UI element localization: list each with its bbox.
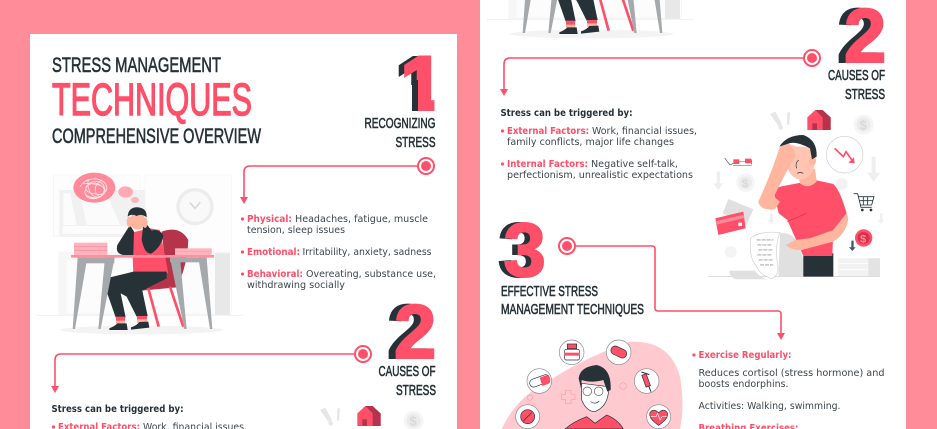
section 1 number: [398, 56, 434, 111]
list: exercise regularly: Exercise Regularly:: [698, 350, 792, 361]
arrow: section 1 connector: [240, 158, 434, 204]
panel: left poster page: [30, 34, 457, 429]
section 3 number: 3: [498, 208, 540, 293]
arrow: section 3 connector: [559, 238, 785, 340]
section 1 heading: [364, 115, 436, 151]
section 3 number: 3: [504, 208, 546, 293]
section 1 heading: RECOGNIZING: [364, 115, 436, 132]
section 2 number: 2: [387, 290, 429, 375]
title: TECHNIQUES: [52, 74, 252, 125]
section 1 number: 1: [401, 42, 443, 127]
list: symptoms of stress: [241, 214, 436, 291]
illustration: doctor with medical icons: [502, 340, 682, 429]
list: symptoms of stress: withdrawing socially: [247, 280, 345, 291]
title: STRESS MANAGEMENT: [52, 54, 221, 77]
section 2 number: 2: [394, 290, 436, 375]
section 1 heading: STRESS: [396, 134, 436, 151]
list: symptoms of stress: Irritability, anxiety, sadness: [302, 247, 432, 258]
list: exercise regularly: boosts endorphins.: [698, 379, 788, 390]
section 2 heading repeated: CAUSES OF: [828, 67, 885, 84]
section 3 heading: EFFECTIVE STRESS: [501, 283, 598, 300]
title: [52, 54, 261, 148]
illustration: desk scene continued: [487, 0, 693, 38]
list: causes of stress: External Factors:: [507, 126, 589, 137]
title: COMPREHENSIVE OVERVIEW: [52, 125, 261, 148]
list: symptoms of stress: Behavioral:: [247, 269, 303, 280]
list: symptoms of stress: Emotional:: [247, 247, 300, 258]
list: causes of stress: perfectionism, unrealistic expectations: [507, 170, 693, 181]
list: causes of stress: [501, 126, 697, 181]
section 2 heading: CAUSES OF: [378, 363, 436, 380]
list: external factors: [52, 422, 247, 429]
list: causes of stress: Negative self-talk,: [591, 159, 678, 170]
illustration: stressed person at desk: [37, 173, 243, 334]
list: symptoms of stress: Headaches, fatigue, muscle: [295, 214, 428, 225]
list: exercise regularly: Reduces cortisol (stress hormone) and: [698, 368, 884, 379]
panel: right poster page: [480, 0, 906, 429]
list: symptoms of stress: tension, sleep issues: [247, 225, 345, 236]
list: exercise regularly: [692, 350, 884, 412]
list: causes of stress: family conflicts, major life changes: [507, 137, 674, 148]
section 1 number: 1: [395, 42, 437, 127]
section 3 heading: MANAGEMENT TECHNIQUES: [501, 301, 644, 318]
arrow: section 2 connector: [51, 346, 371, 393]
list: causes of stress: Internal Factors:: [507, 159, 588, 170]
text: causes intro: Stress can be triggered by:: [52, 404, 184, 415]
text: causes intro repeated: Stress can be triggered by:: [500, 108, 632, 119]
list: symptoms of stress: Overeating, substance use,: [306, 269, 436, 280]
section 2 heading repeated: STRESS: [845, 86, 885, 103]
illustration: causes of stress, top: [258, 406, 434, 429]
section 3 heading: [501, 283, 644, 318]
section 2 heading: STRESS: [396, 382, 436, 399]
list: causes of stress: Work, financial issues,: [592, 126, 697, 137]
illustration: causes of stress: [708, 110, 884, 279]
list: symptoms of stress: Physical:: [247, 214, 292, 225]
arrow: section 2 connector repeated: [500, 50, 820, 96]
list: exercise regularly: Activities: Walking, swimming.: [698, 401, 840, 412]
section 2 heading: [378, 363, 436, 399]
section 2 heading repeated: [828, 67, 885, 103]
